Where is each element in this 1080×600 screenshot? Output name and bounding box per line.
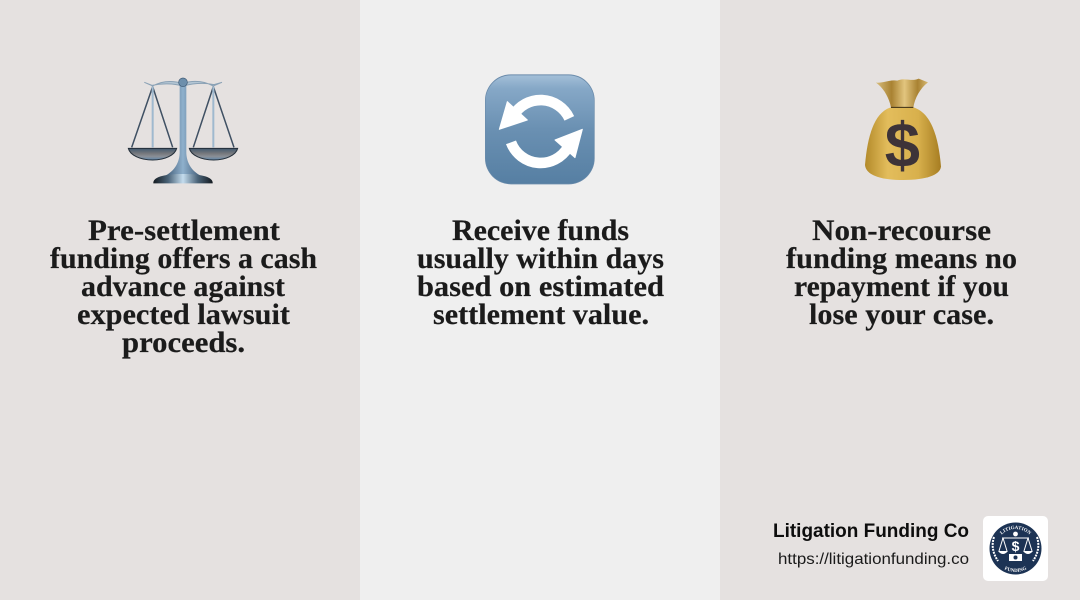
- icon: balance scales: [128, 78, 238, 183]
- text: non-recourse description: lose your case.: [809, 298, 994, 331]
- text: receive funds description: [417, 214, 664, 331]
- text: dollar sign: $: [885, 111, 920, 181]
- text: non-recourse description: Non-recourse: [812, 214, 991, 247]
- panel: pre-settlement funding: [0, 0, 360, 600]
- text: non-recourse description: funding means no: [786, 242, 1017, 275]
- text: receive funds description: settlement value.: [433, 298, 649, 331]
- text: receive funds description: usually within days: [417, 242, 664, 275]
- logo: litigation funding badge: $: [1012, 538, 1020, 554]
- text: pre-settlement description: advance against: [81, 270, 285, 303]
- text: receive funds description: based on estimated: [417, 270, 664, 303]
- icon: refresh arrows: [485, 74, 595, 184]
- text: brand name: Litigation Funding Co: [773, 521, 969, 542]
- text: non-recourse description: repayment if you: [794, 270, 1009, 303]
- panel: receive funds: [360, 0, 720, 600]
- text: receive funds description: Receive funds: [452, 214, 629, 247]
- logo: litigation funding badge: [983, 516, 1048, 581]
- icon: money bag: [865, 79, 941, 181]
- logo: litigation funding badge: FUNDING: [1004, 566, 1026, 572]
- text: website url: https://litigationfunding.co: [778, 551, 969, 568]
- text: pre-settlement description: funding offers a cash: [50, 242, 317, 275]
- text: non-recourse description: [786, 214, 1017, 331]
- logo: litigation funding badge: LITIGATION: [1000, 526, 1032, 535]
- text: pre-settlement description: expected lawsuit: [77, 298, 290, 331]
- text: pre-settlement description: Pre-settlement: [88, 214, 280, 247]
- text: pre-settlement description: [50, 214, 317, 359]
- text: pre-settlement description: proceeds.: [122, 326, 245, 359]
- panel: non-recourse funding: [773, 78, 1048, 581]
